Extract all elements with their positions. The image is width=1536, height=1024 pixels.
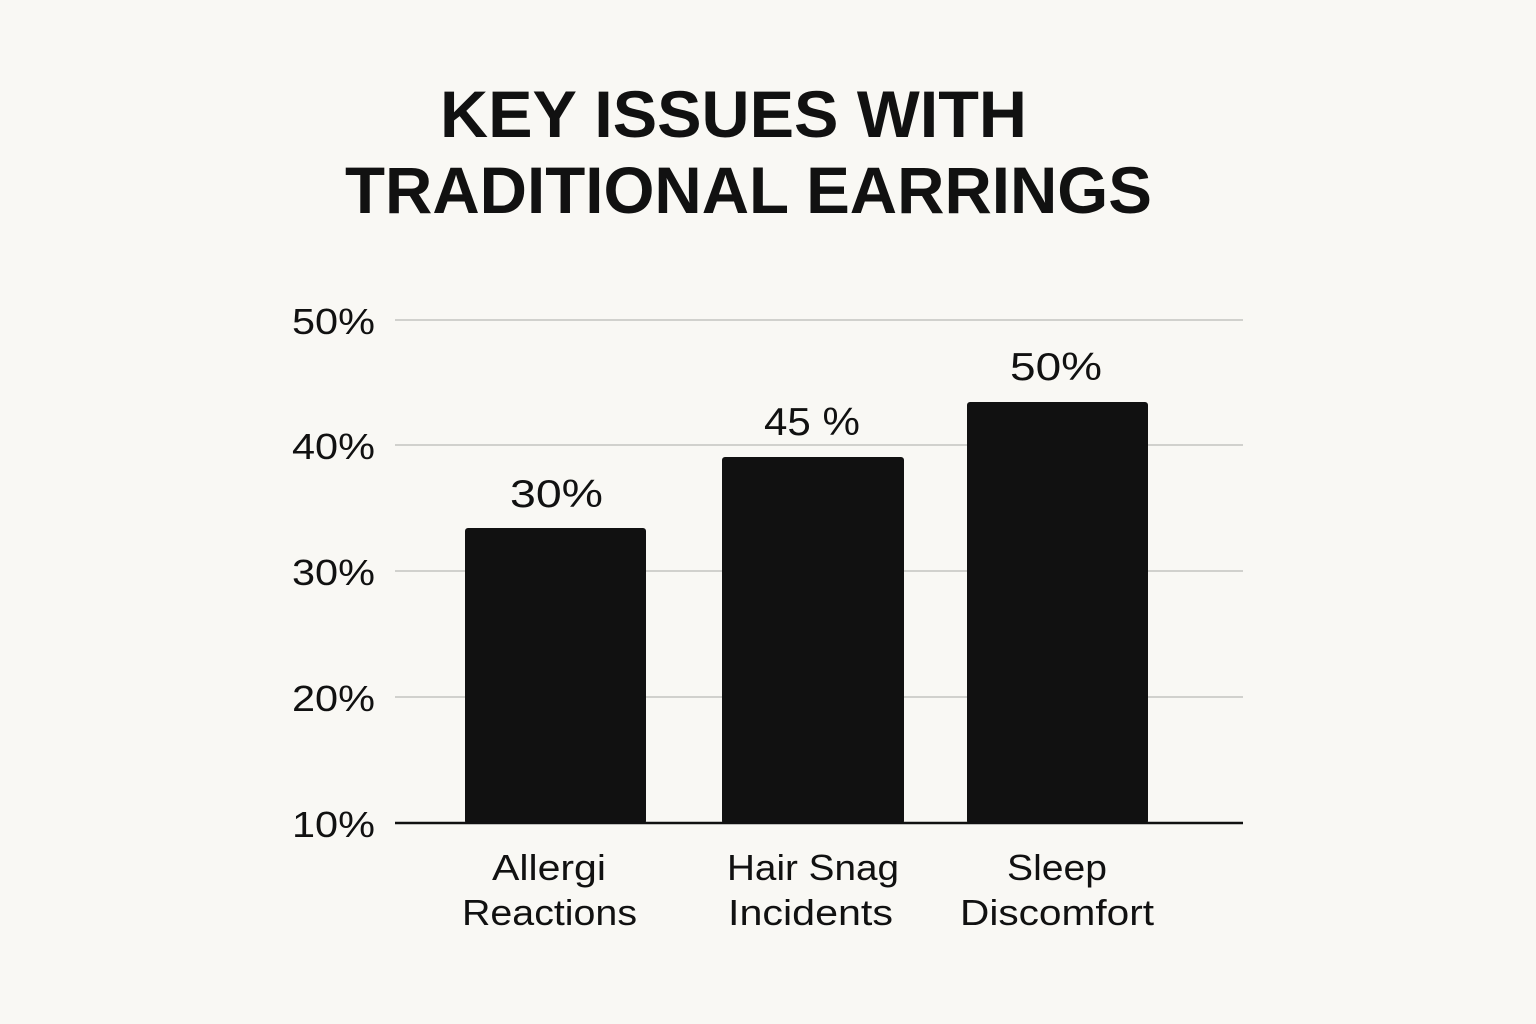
bar: Allergi Reactions bbox=[465, 528, 646, 824]
y axis labels: 10% bbox=[292, 804, 375, 845]
x axis baseline bbox=[395, 822, 1243, 824]
category labels bbox=[462, 847, 1154, 933]
category labels: Hair Snag bbox=[727, 847, 899, 888]
title: KEY ISSUES WITH bbox=[440, 77, 1027, 151]
y axis labels: 20% bbox=[292, 678, 375, 719]
bar chart bbox=[465, 402, 1148, 824]
category labels: Reactions bbox=[462, 892, 637, 933]
value labels: 50% bbox=[1010, 346, 1102, 389]
value labels: 45 % bbox=[764, 401, 860, 444]
category labels: Sleep bbox=[1007, 847, 1107, 888]
title: TRADITIONAL EARRINGS bbox=[345, 153, 1152, 227]
category labels: Discomfort bbox=[960, 892, 1154, 933]
y axis labels: 40% bbox=[292, 426, 375, 467]
category labels: Incidents bbox=[728, 892, 893, 933]
value labels: 30% bbox=[510, 473, 603, 516]
y axis labels bbox=[292, 301, 375, 845]
bar: Sleep Discomfort bbox=[967, 402, 1148, 824]
y axis labels: 30% bbox=[292, 552, 375, 593]
title bbox=[345, 77, 1152, 227]
category labels: Allergi bbox=[492, 847, 606, 888]
value labels bbox=[510, 346, 1102, 516]
y axis labels: 50% bbox=[292, 301, 375, 342]
bar: Hair Snag Incidents bbox=[722, 457, 904, 824]
